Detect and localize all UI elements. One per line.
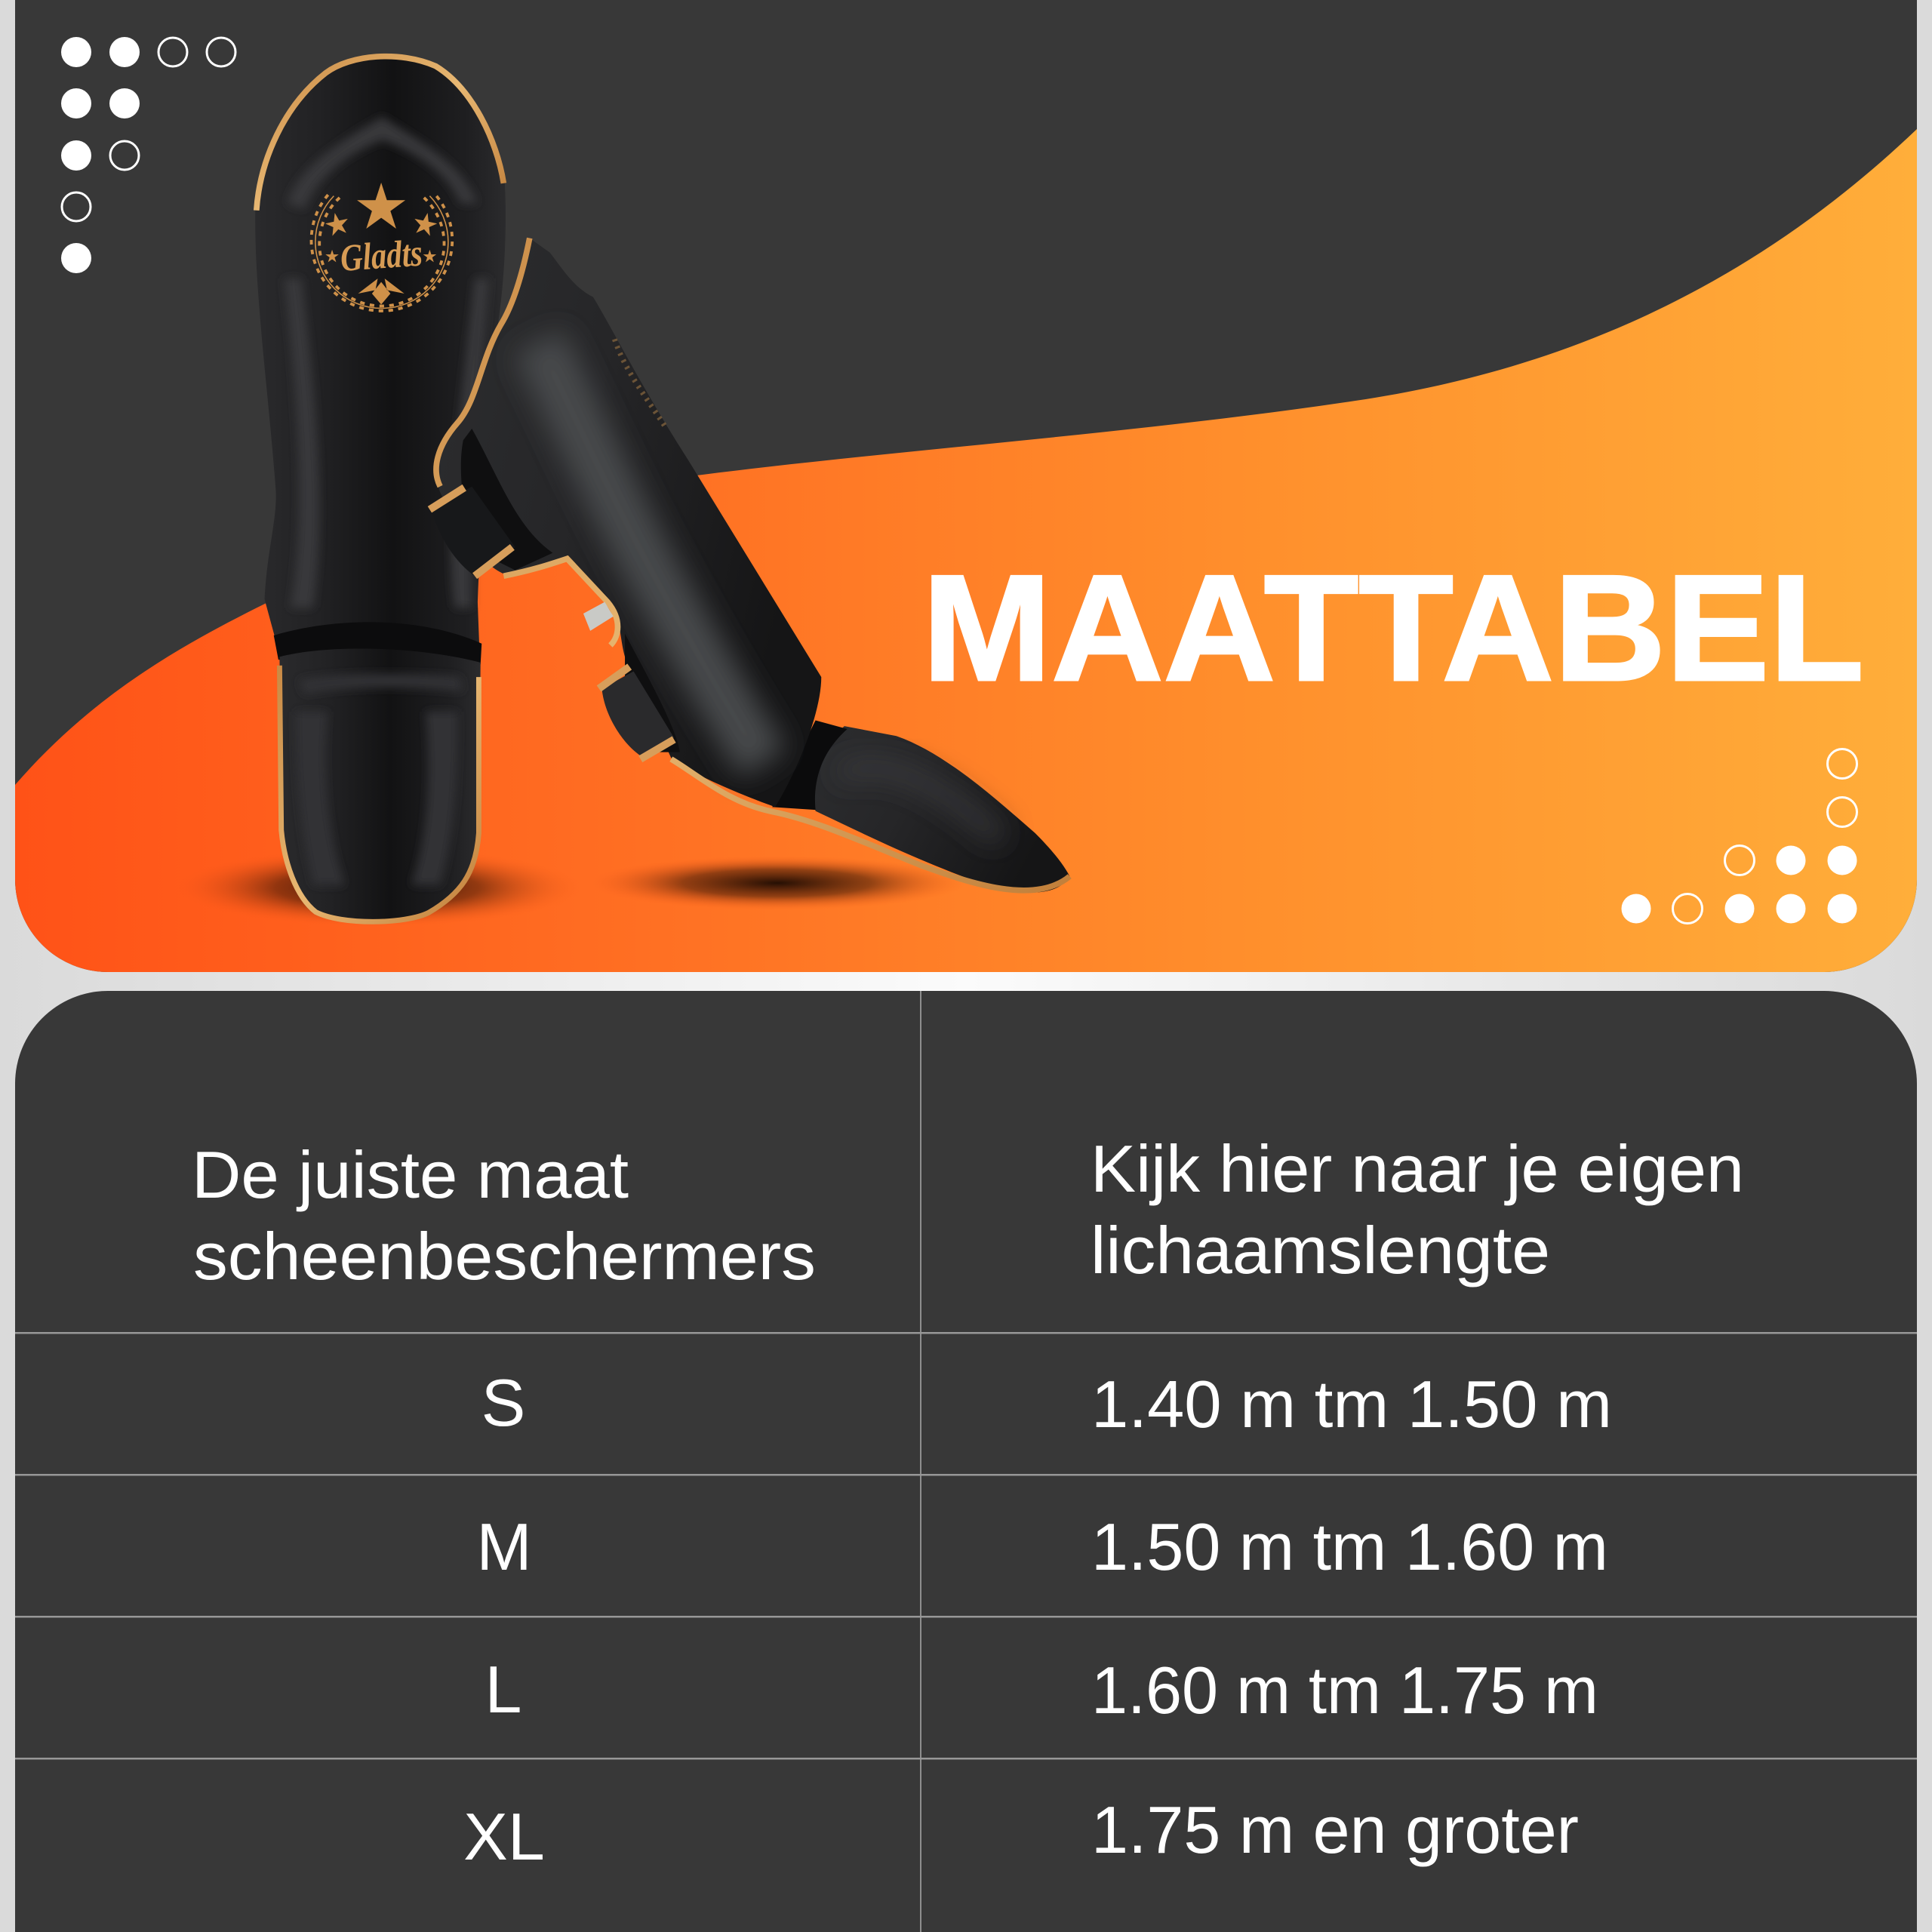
row: L: 1.60 m tm 1.75 m xyxy=(1091,1653,1598,1727)
logo ornament xyxy=(358,278,405,305)
table column divider xyxy=(920,991,921,1932)
floor shadows under shin guards xyxy=(174,848,966,927)
dot pattern: bottom right xyxy=(1621,749,1857,924)
shin section xyxy=(255,55,506,648)
upper strap xyxy=(432,487,515,576)
row: L xyxy=(485,1652,1598,1727)
illustration: shin guards xyxy=(255,55,1069,921)
logo wordmark: Gladts xyxy=(339,232,423,279)
faint logo on side xyxy=(614,339,666,429)
header: size column: scheenbeschermers xyxy=(193,1219,816,1294)
main shin body xyxy=(436,238,821,807)
logo stars xyxy=(324,183,439,262)
table background xyxy=(15,991,1917,1932)
leather highlight xyxy=(538,342,764,764)
left shin guard: upright, front view xyxy=(255,55,506,921)
toe section xyxy=(813,726,1069,893)
elastic strap xyxy=(274,622,481,664)
header: body length column: lichaamslengte xyxy=(1091,1213,1550,1287)
leather highlights xyxy=(285,117,489,608)
foot section xyxy=(279,648,481,920)
table row dividers xyxy=(15,1332,1917,1760)
gold rim: shin section xyxy=(257,57,503,211)
inner strap edge xyxy=(461,429,680,752)
panel: hero banner xyxy=(15,0,1917,972)
row: L: L xyxy=(485,1652,521,1727)
row: S xyxy=(481,1365,1612,1441)
row: S: 1.40 m tm 1.50 m xyxy=(1091,1367,1612,1441)
gold rim: outer edge xyxy=(436,238,1069,891)
gold strap loops xyxy=(429,488,674,759)
row: M xyxy=(476,1509,1608,1584)
header: size column xyxy=(192,1137,816,1294)
toe highlight xyxy=(838,768,1001,838)
row: XL xyxy=(463,1792,1579,1874)
header: body length column xyxy=(1091,1131,1744,1287)
logo xyxy=(311,183,452,311)
orange gradient wave xyxy=(15,129,1917,972)
row: XL: 1.75 m en groter xyxy=(1091,1792,1579,1867)
row: M: 1.50 m tm 1.60 m xyxy=(1091,1509,1608,1584)
gold rim: foot section xyxy=(279,666,478,921)
row: XL: XL xyxy=(463,1799,545,1874)
leather highlight: foot xyxy=(296,674,463,885)
panel: size table xyxy=(15,991,1917,1932)
row: M: M xyxy=(476,1509,532,1584)
right shin guard: tilted, side view xyxy=(429,238,1069,893)
row: S: S xyxy=(481,1365,525,1440)
elastic strap xyxy=(772,721,848,810)
metal buckle xyxy=(583,602,614,631)
heading: MAATTABEL: MAATTABEL xyxy=(922,544,1864,712)
dark panel background xyxy=(15,0,1917,972)
header: body length column: Kijk hier naar je eigen xyxy=(1091,1131,1744,1206)
header: size column: De juiste maat xyxy=(192,1137,629,1212)
dot pattern: top left xyxy=(61,37,235,273)
lower strap xyxy=(601,671,674,757)
logo laurel wreath xyxy=(311,195,452,311)
